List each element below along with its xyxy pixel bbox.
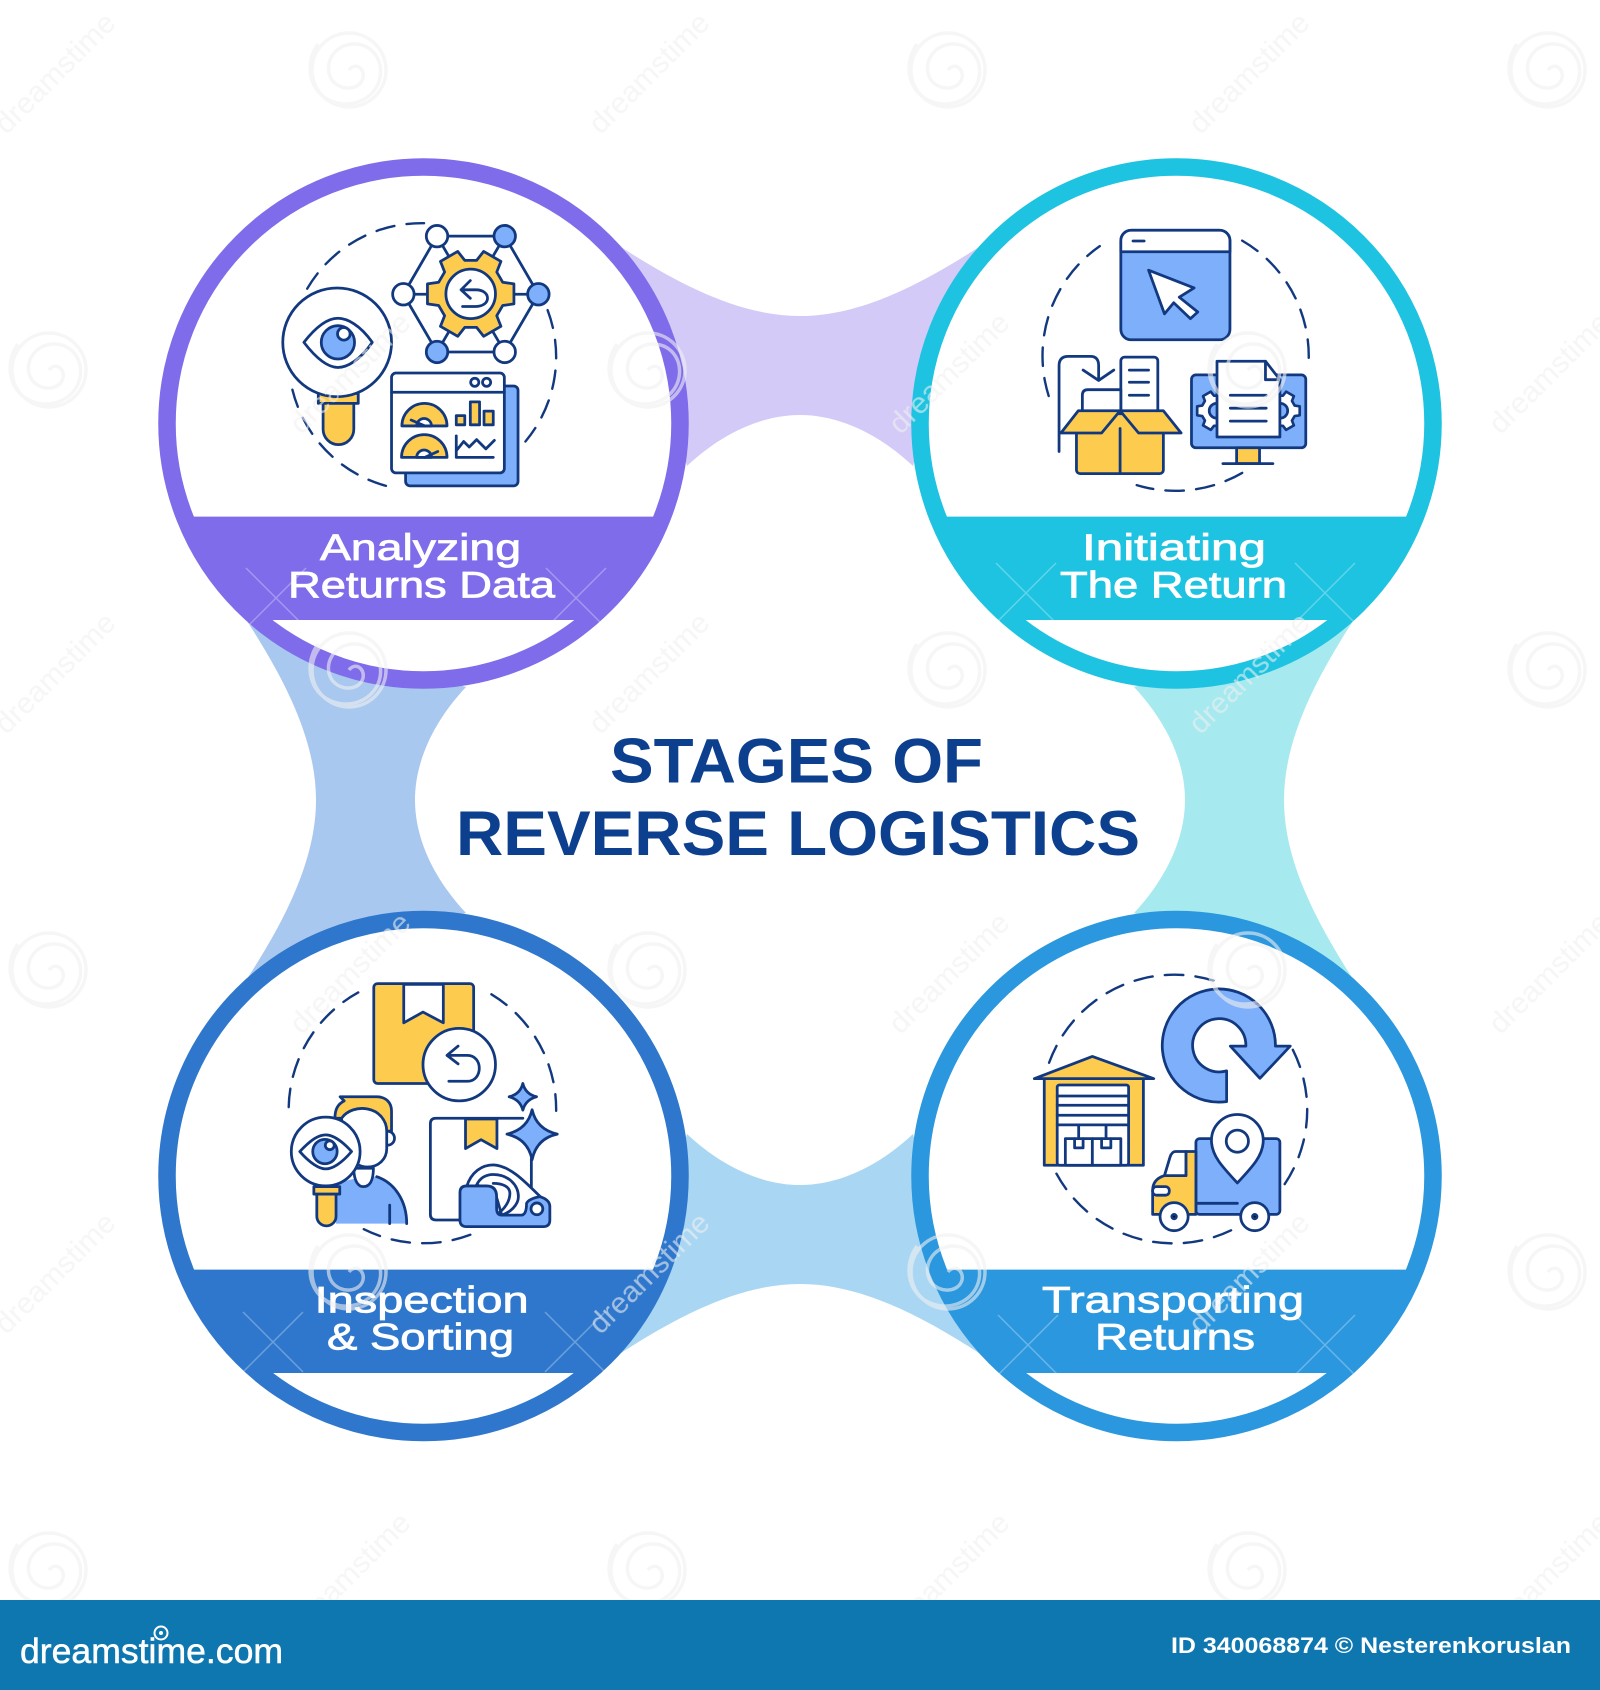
label band: purple: [184, 517, 662, 620]
watermark: diagonal wordmarks: dreamstime: [582, 606, 716, 740]
ring: blue: [167, 920, 680, 1432]
label: Transporting Returns: Returns: [1095, 1316, 1255, 1358]
footer logo: dreamstime.com: dreamstime.com: [20, 1632, 283, 1671]
label band: sky blue: [938, 1270, 1416, 1373]
panel: Analyzing Returns Data: [167, 167, 680, 680]
title: STAGES OF: [610, 726, 983, 796]
label: Inspection & Sorting: Inspection: [315, 1280, 529, 1320]
footer bar: [0, 1600, 1600, 1690]
watermark: diagonal wordmarks: dreamstime: [882, 1506, 1016, 1640]
icon: data analysis: [283, 223, 556, 486]
label: Analyzing Returns Data: [288, 527, 556, 606]
watermark: diagonal wordmarks: dreamstime: [882, 306, 1016, 440]
watermark: diagonal wordmarks: dreamstime: [283, 906, 417, 1040]
watermark: diagonal wordmarks: dreamstime: [1182, 6, 1316, 140]
panel: Transporting Returns: [920, 920, 1433, 1432]
title: REVERSE LOGISTICS: [456, 799, 1140, 869]
panel: Initiating The Return: [920, 167, 1433, 680]
watermark: diagonal wordmarks: dreamstime: [283, 1506, 417, 1640]
watermark: diagonal wordmarks: dreamstime: [882, 906, 1016, 1040]
ring: sky blue: [920, 920, 1433, 1432]
watermark: lattice crosses on bands: [243, 563, 1355, 1375]
label: Inspection & Sorting: [315, 1280, 529, 1358]
label: Initiating The Return: The Return: [1060, 565, 1287, 606]
watermark: diagonal wordmarks: dreamstime: [1182, 606, 1316, 740]
watermark: diagonal wordmarks: dreamstime: [283, 306, 417, 440]
label: Analyzing Returns Data: Analyzing: [320, 527, 521, 568]
ring: cyan: [920, 167, 1433, 680]
label: Analyzing Returns Data: Returns Data: [288, 565, 556, 606]
connector: left blue: [247, 621, 466, 979]
label: Inspection & Sorting: & Sorting: [327, 1316, 514, 1358]
label: Transporting Returns: Transporting: [1042, 1280, 1304, 1320]
label band: blue: [184, 1270, 662, 1373]
icon: inspection and sorting: [289, 984, 557, 1243]
ring: purple: [167, 167, 680, 680]
panel: Inspection & Sorting: [167, 920, 680, 1432]
watermark: diagonal wordmarks: dreamstime: [582, 1206, 716, 1340]
label: Transporting Returns: [1042, 1280, 1304, 1358]
watermark: diagonal wordmarks: dreamstime: [582, 6, 716, 140]
label: Initiating The Return: Initiating: [1082, 527, 1266, 568]
footer credit: ID 340068874 © Nesterenkoruslan: [1171, 1633, 1571, 1658]
connector: right aqua: [1134, 621, 1353, 979]
label: Initiating The Return: [1060, 527, 1287, 606]
label band: cyan: [938, 517, 1416, 620]
connector: top purple: [621, 247, 979, 466]
icon: initiating return: [1043, 230, 1309, 491]
icon: transporting returns: [1034, 975, 1307, 1243]
title: [456, 726, 1140, 869]
connector: bottom sky: [621, 1134, 979, 1353]
watermark: diagonal wordmarks: dreamstime: [1182, 1206, 1316, 1340]
